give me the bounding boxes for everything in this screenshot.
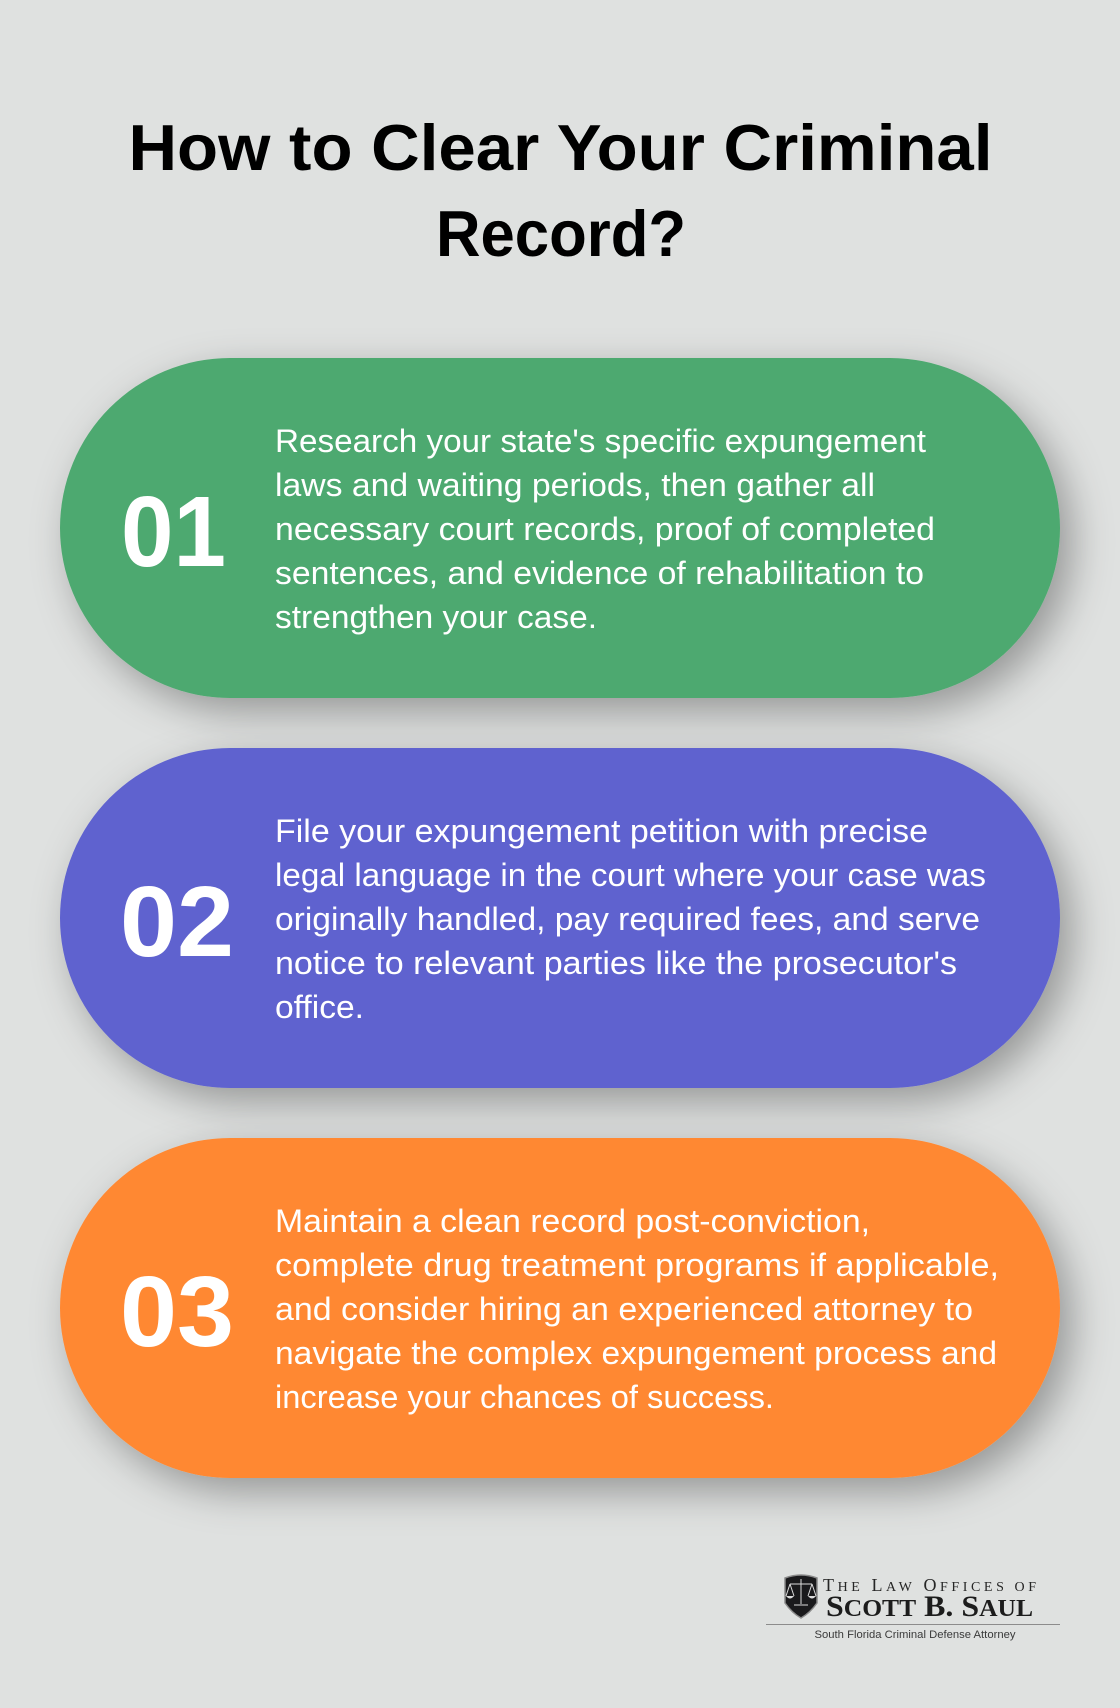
pill: orange	[60, 1138, 1060, 1478]
panel: step 01	[60, 358, 1060, 698]
text: step 01 description: strengthen your case.	[275, 599, 597, 635]
logo name	[823, 1575, 1036, 1623]
number: 03: 03	[120, 1256, 234, 1368]
logo name: T HE L AW O FFICES OF	[823, 1575, 1036, 1595]
pill: green	[60, 358, 1060, 698]
panel: step 02	[60, 748, 1060, 1088]
text: step 01 description: necessary court records, proof of completed	[275, 511, 935, 547]
number: 01: 01	[121, 476, 226, 588]
text: step 03 description: complete drug treatment programs if applicable,	[275, 1247, 999, 1283]
title: How to Clear Your Criminal	[128, 112, 993, 184]
logo rule	[766, 1624, 1060, 1625]
text: step 02 description	[275, 813, 986, 1025]
text: step 03 description	[275, 1203, 999, 1415]
text: step 03 description: increase your chances of success.	[275, 1379, 774, 1415]
text: step 03 description: Maintain a clean record post-conviction,	[275, 1203, 870, 1239]
text: step 01 description: laws and waiting periods, then gather all	[275, 467, 875, 503]
text: step 02 description: office.	[275, 989, 364, 1025]
text: step 03 description: navigate the complex expungement process and	[275, 1335, 997, 1371]
title: Record?	[436, 198, 686, 270]
title	[128, 112, 993, 270]
text: step 02 description: File your expungement petition with precise	[275, 813, 928, 849]
logo: The Law Offices of Scott B. Saul	[766, 1575, 1060, 1641]
text: step 01 description: sentences, and evidence of rehabilitation to	[275, 555, 924, 591]
panel: step 03	[60, 1138, 1060, 1478]
text: step 02 description: legal language in the court where your case was	[275, 857, 986, 893]
number: 02: 02	[120, 866, 234, 978]
text: step 03 description: and consider hiring an experienced attorney to	[275, 1291, 973, 1327]
icon: scales shield	[785, 1575, 817, 1618]
logo tagline: South Florida Criminal Defense Attorney	[814, 1629, 1016, 1641]
logo name: SCOTT B. SAUL	[826, 1590, 1033, 1623]
text: step 02 description: notice to relevant parties like the prosecutor's	[275, 945, 957, 981]
text: step 01 description: Research your state's specific expungement	[275, 423, 926, 459]
pill: purple	[60, 748, 1060, 1088]
text: step 01 description	[275, 423, 935, 635]
text: step 02 description: originally handled, pay required fees, and serve	[275, 901, 980, 937]
